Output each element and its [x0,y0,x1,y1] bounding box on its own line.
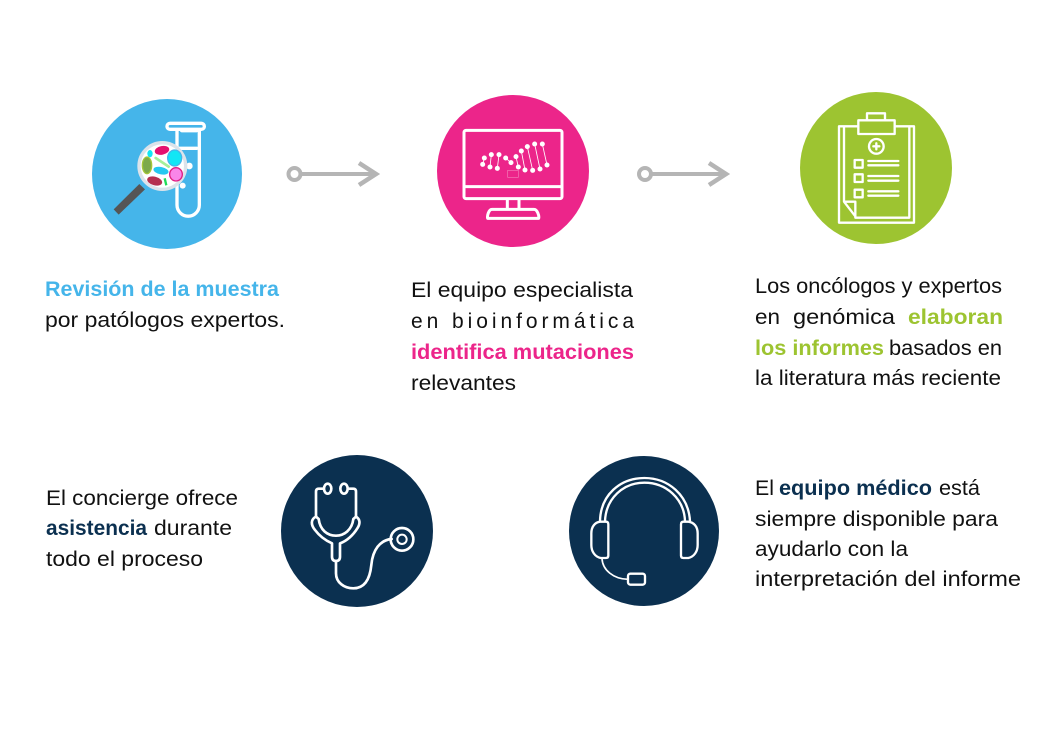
text: step 3 description: la literatura más reciente [755,367,1001,390]
text: concierge description: durante [154,517,232,540]
text: medical team description: ayudarlo con la [755,538,908,561]
text: concierge description [46,487,238,571]
text: concierge description: asistencia [46,517,147,540]
text: step 1 description [45,278,285,332]
text: medical team description [755,477,1021,591]
text: step 3 description: Los oncólogos y expertos [755,275,1002,298]
panel: medical team [569,456,1021,606]
text: medical team description: siempre disponible para [755,508,998,531]
arrow: step 1 to step 2 [288,163,376,185]
text: step 3 description: elaboran [908,306,1003,329]
text: step 2 description: en bioinformática [411,310,634,333]
icon: blue circle with test tube and magnifier [92,99,242,249]
icon: navy circle with headset [569,456,719,606]
text: concierge description: todo el proceso [46,548,203,571]
panel: concierge assistance [46,455,433,607]
text: step 2 description: relevantes [411,372,516,395]
text: step 1 description: Revisión de la muestra [45,278,279,301]
text: medical team description: interpretación del informe [755,568,1021,591]
text: step 2 description [411,279,634,395]
icon: navy circle with stethoscope [281,455,433,607]
text: step 3 description: basados en [889,337,1002,360]
panel: step 2 bioinformatics [411,95,634,395]
text: step 3 description [755,275,1003,390]
text: medical team description: está [939,477,980,500]
panel: step 3 reports [755,92,1003,390]
text: step 3 description: en [755,306,780,329]
panel: step 1 sample review [45,99,285,332]
text: step 2 description: El equipo especialista [411,279,633,302]
text: step 3 description: los informes [755,337,884,360]
text: medical team description: equipo médico [779,477,932,500]
text: step 1 description: por patólogos expertos. [45,309,285,332]
text: medical team description: El [755,477,774,500]
arrow: step 2 to step 3 [639,163,726,185]
icon: green circle with clipboard [800,92,952,244]
icon: pink circle with monitor and DNA [437,95,589,247]
text: step 2 description: identifica mutaciones [411,341,634,364]
text: concierge description: El concierge ofrece [46,487,238,510]
text: step 3 description: genómica [793,306,895,329]
